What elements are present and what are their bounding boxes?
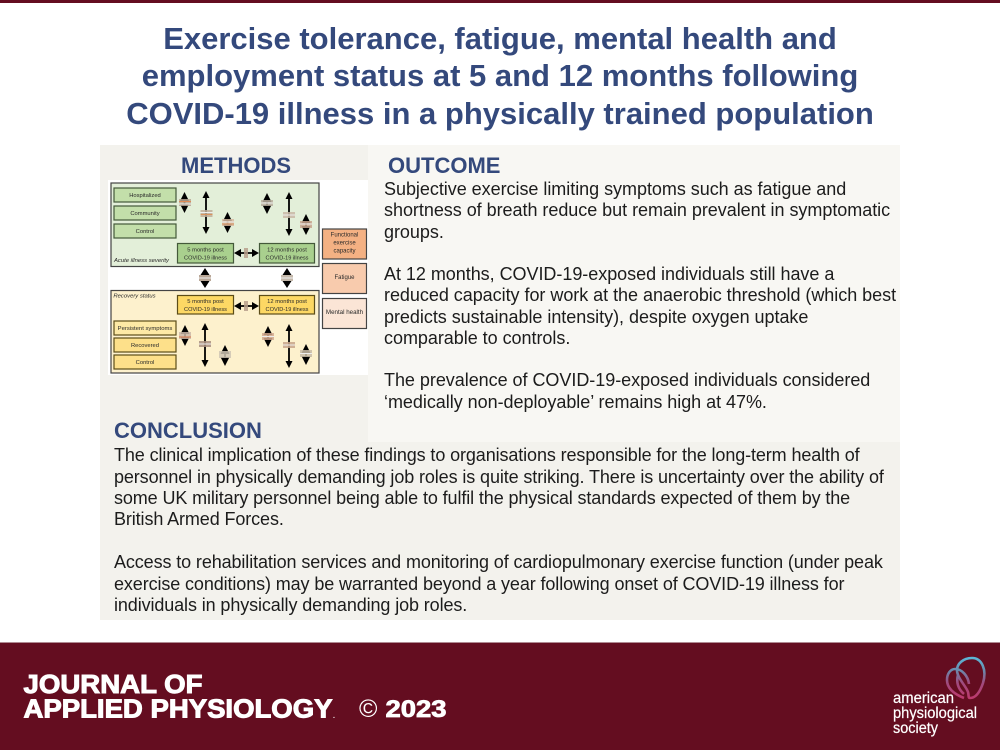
logo text: physiological [893, 705, 977, 722]
arrows: between panels [199, 268, 293, 288]
panel: acute illness severity [111, 183, 319, 266]
journal wordmark: APPLIED PHYSIOLOGY [24, 696, 333, 724]
timepoint: 5 months: 5 months post [187, 299, 224, 305]
panel: recovery status [111, 290, 319, 373]
text: outcome findings: At 12 months, COVID-19-exposed individuals still have a [384, 264, 834, 284]
logo text [893, 690, 977, 737]
text: outcome findings: Subjective exercise limiting symptoms such as fatigue and [384, 179, 846, 199]
text: conclusion body: some UK military personnel being able to fulfil the physical standards expected of them by the [114, 488, 850, 508]
title: COVID-19 illness in a physically trained population [126, 96, 874, 131]
arrows: green panel [179, 191, 312, 258]
timepoint: 12 months [260, 296, 314, 314]
text: outcome findings: shortness of breath reduce but remain prevalent in symptomatic [384, 200, 890, 220]
timepoint: 5 months [178, 244, 234, 263]
group: persistent symptoms [114, 321, 176, 335]
outcome: functional exercise capacity [322, 229, 366, 259]
timepoint: 5 months [178, 296, 234, 314]
outcome: functional exercise capacity: exercise [333, 240, 356, 246]
group: recovered [114, 338, 176, 352]
journal wordmark [23, 671, 446, 724]
text: outcome findings: groups. [384, 222, 444, 242]
text: outcome findings: reduced capacity for work at the anaerobic threshold (which best [384, 285, 896, 305]
outcome: mental health [322, 298, 366, 328]
text: outcome findings: predicts sustainable intensity), despite oxygen uptake [384, 307, 808, 327]
text: outcome findings: The prevalence of COVID-19-exposed individuals considered [384, 370, 870, 390]
text: conclusion body [114, 445, 884, 615]
timepoint: 12 months [260, 244, 314, 263]
heading: conclusion: CONCLUSION [114, 418, 262, 443]
text: outcome findings [384, 179, 896, 412]
timepoint: 12 months: COVID-19 illness [266, 256, 309, 262]
group: control: Control [136, 229, 154, 235]
timepoint: 5 months: COVID-19 illness [184, 307, 227, 313]
logo mark [947, 658, 984, 698]
text: conclusion body: exercise conditions) may be warranted beyond a year following onset of COVID-19 illness for [114, 574, 844, 594]
group: control [114, 355, 176, 369]
outcome: functional exercise capacity: capacity [333, 248, 356, 254]
text: conclusion body: Access to rehabilitation services and monitoring of cardiopulmonary exercise function (under peak [114, 552, 883, 572]
title [126, 21, 874, 131]
text: conclusion body: individuals in physically demanding job roles. [114, 595, 467, 615]
text: conclusion body: personnel in physically demanding job roles is quite striking. There is uncertainty over the ability of [114, 467, 884, 487]
timepoint: 5 months: COVID-19 illness [184, 256, 227, 262]
text: conclusion body: The clinical implication of these findings to organisations responsible for the long-term health of [114, 445, 860, 465]
outcome: fatigue [322, 264, 366, 294]
outcome: functional exercise capacity: Functional [331, 232, 358, 238]
group: community [114, 206, 176, 220]
timepoint: 12 months: COVID-19 illness [266, 307, 309, 313]
society logo [893, 656, 986, 737]
journal wordmark: JOURNAL OF [24, 671, 202, 699]
group: control [114, 224, 176, 238]
text: outcome findings: comparable to controls. [384, 328, 570, 348]
journal wordmark: . [333, 713, 335, 720]
title: employment status at 5 and 12 months following [142, 58, 858, 93]
title: Exercise tolerance, fatigue, mental health and [163, 21, 837, 56]
footer band [0, 642, 1000, 750]
group: persistent symptoms: Persistent symptoms [118, 326, 172, 332]
heading: methods: METHODS [181, 153, 291, 178]
text: outcome findings: ‘medically non-deployable’ remains high at 47%. [384, 392, 767, 412]
logo text: american [893, 690, 954, 707]
panel: outcome [368, 145, 900, 442]
timepoint: 5 months: 5 months post [187, 248, 224, 254]
group: recovered: Recovered [131, 343, 159, 349]
panel: methods [100, 145, 368, 442]
top bar [0, 0, 1000, 3]
group: control: Control [136, 360, 154, 366]
methods diagram [108, 180, 368, 375]
panel: recovery status: Recovery status [113, 294, 156, 300]
logo text: society [893, 720, 938, 737]
journal wordmark: © [359, 695, 378, 723]
outcome: fatigue: Fatigue [334, 275, 355, 281]
journal wordmark: 2023 [386, 696, 446, 723]
heading: outcome: OUTCOME [388, 153, 500, 178]
group: community: Community [130, 211, 160, 217]
group: hospitalized [114, 188, 176, 202]
text: conclusion body: British Armed Forces. [114, 509, 284, 529]
panel: acute illness severity: Acute illness severity [113, 258, 170, 264]
outcome: mental health: Mental health [326, 309, 364, 316]
timepoint: 12 months: 12 months post [267, 299, 307, 305]
panel: conclusion [100, 418, 900, 620]
arrows: yellow panel [179, 301, 312, 368]
timepoint: 12 months: 12 months post [267, 248, 307, 254]
group: hospitalized: Hospitalized [129, 193, 161, 199]
